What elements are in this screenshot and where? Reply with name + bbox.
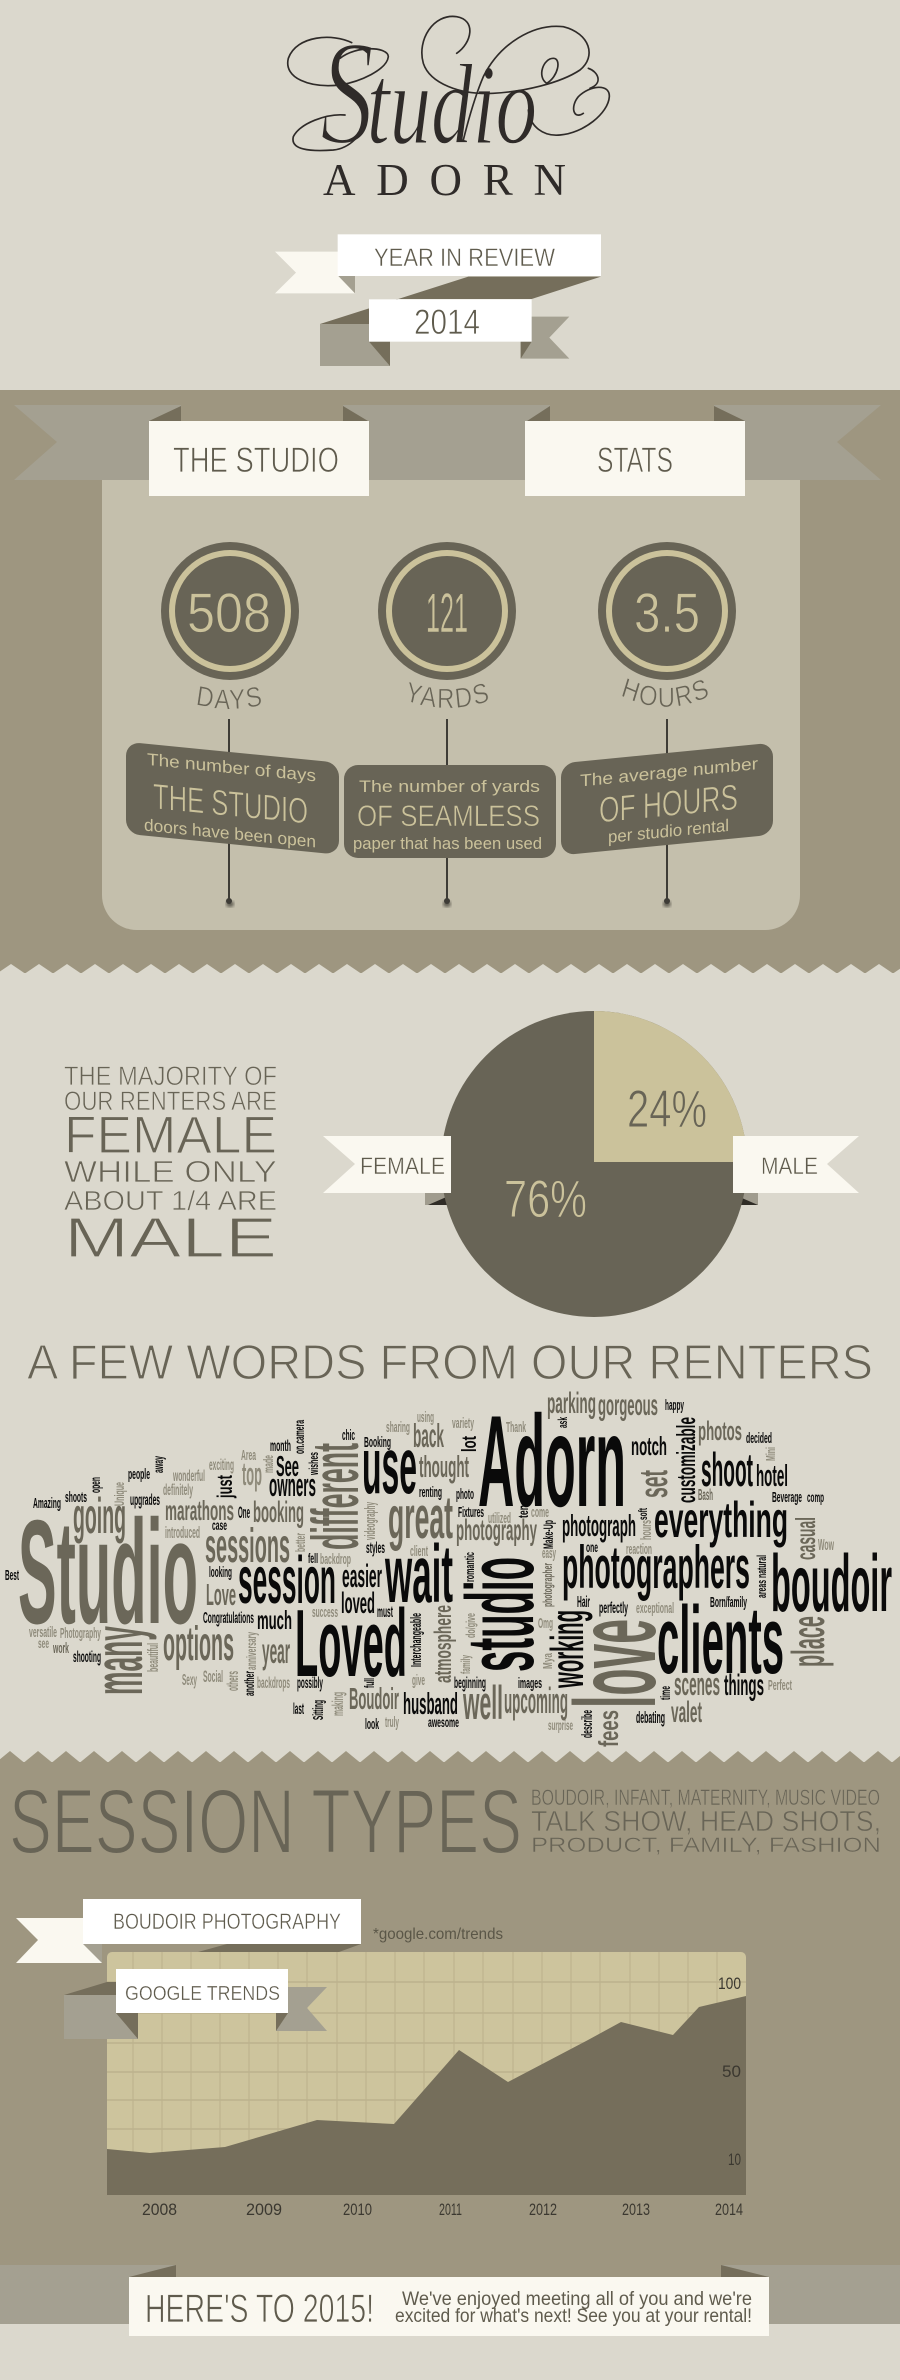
word cloud: Sitting bbox=[310, 1700, 327, 1720]
sign: of hours: per studio rental bbox=[608, 816, 729, 847]
word cloud: shooting bbox=[73, 1649, 101, 1666]
area chart: google trends: 2011 bbox=[439, 2200, 462, 2219]
word cloud: sessions bbox=[205, 1520, 290, 1573]
word cloud: Studio bbox=[18, 1490, 198, 1655]
word cloud: marathons bbox=[165, 1495, 234, 1526]
area chart: google trends: 50 bbox=[722, 2062, 741, 2081]
word cloud: hours bbox=[638, 1520, 655, 1540]
word cloud: utilized bbox=[488, 1510, 511, 1527]
panel: the studio stats band bbox=[0, 390, 900, 973]
word cloud: exceptional bbox=[636, 1600, 674, 1617]
word cloud: Mini bbox=[763, 1447, 778, 1461]
text block: majority of renters are female: MALE bbox=[64, 1206, 277, 1270]
sign: of seamless: The number of yards bbox=[359, 777, 540, 796]
word cloud: come bbox=[531, 1504, 549, 1521]
ribbon: year in review 2014: 2014 bbox=[414, 303, 480, 342]
word cloud: month bbox=[270, 1438, 291, 1455]
word cloud: wishes bbox=[306, 1452, 321, 1476]
stat: 3.5 hours bbox=[598, 542, 736, 707]
sign: of hours: OF HOURS bbox=[599, 776, 738, 831]
panel: session types band bbox=[0, 1751, 900, 2282]
word cloud: comp bbox=[807, 1489, 824, 1505]
word cloud: awesome bbox=[428, 1714, 459, 1730]
word cloud: client bbox=[410, 1543, 428, 1560]
word cloud: different bbox=[298, 1443, 372, 1550]
area chart: google trends: 2013 bbox=[622, 2200, 650, 2219]
text block: list of session types bbox=[531, 1785, 881, 1857]
word cloud: hotel bbox=[756, 1458, 788, 1493]
word cloud: photo bbox=[456, 1486, 474, 1503]
ribbon label: male: MALE bbox=[761, 1153, 818, 1180]
word cloud: upcoming bbox=[504, 1680, 568, 1721]
word cloud: atmosphere bbox=[430, 1605, 457, 1683]
heading: session types: SESSION TYPES bbox=[9, 1771, 522, 1873]
word cloud: options bbox=[163, 1618, 234, 1671]
area chart: google trends: 10 bbox=[728, 2150, 741, 2169]
hanging strings with pins bbox=[226, 719, 671, 907]
word cloud: much bbox=[257, 1605, 292, 1635]
word cloud: parking bbox=[547, 1387, 596, 1420]
stat: 3.5 hours: 3.5 bbox=[634, 581, 700, 644]
word cloud: decided bbox=[746, 1430, 772, 1447]
word cloud: soft bbox=[636, 1508, 650, 1520]
word cloud: Omg bbox=[538, 1615, 553, 1632]
word cloud: must bbox=[377, 1604, 393, 1621]
sign: the studio bbox=[126, 742, 339, 855]
word cloud: session bbox=[238, 1543, 336, 1618]
word cloud: Mya bbox=[540, 1653, 555, 1669]
sign: the studio: The number of days bbox=[147, 750, 316, 785]
text block: majority of renters are female: ABOUT 1/4 ARE bbox=[64, 1185, 277, 1216]
word cloud: making bbox=[330, 1692, 347, 1716]
word cloud: Make-Up bbox=[540, 1520, 556, 1549]
sign: of seamless bbox=[344, 765, 556, 858]
logo: Studio Adorn bbox=[288, 11, 609, 205]
text block: majority of renters are female: FEMALE bbox=[64, 1106, 277, 1165]
word cloud: areas natural bbox=[754, 1555, 769, 1598]
word cloud: just bbox=[214, 1475, 237, 1499]
ribbon: google trends bbox=[64, 1969, 327, 2039]
logo: Studio Adorn: Studio bbox=[320, 11, 537, 176]
heading: a few words from our renters: A FEW WORDS FROM OUR RENTERS bbox=[27, 1336, 873, 1390]
word cloud: Loved bbox=[295, 1590, 407, 1697]
word cloud: Wow bbox=[818, 1537, 834, 1554]
word cloud: exciting bbox=[209, 1457, 234, 1474]
word cloud: happy bbox=[665, 1397, 684, 1414]
word cloud: shoots bbox=[65, 1489, 87, 1506]
word cloud: wonderful bbox=[173, 1468, 205, 1485]
word cloud: see bbox=[38, 1635, 49, 1651]
word cloud: using bbox=[417, 1409, 434, 1426]
word cloud: case bbox=[212, 1517, 227, 1533]
stat: 508 days bbox=[161, 542, 299, 709]
word cloud: working bbox=[541, 1610, 593, 1688]
word cloud: possibly bbox=[297, 1675, 323, 1692]
ribbon: boudoir photography: BOUDOIR PHOTOGRAPHY bbox=[113, 1909, 341, 1934]
word cloud: beautiful bbox=[145, 1643, 162, 1672]
closing headline: HERE'S TO 2015! bbox=[145, 2287, 374, 2331]
area chart: google trends: 2012 bbox=[529, 2200, 557, 2219]
word cloud: lot bbox=[459, 1436, 481, 1452]
word cloud: give bbox=[412, 1672, 425, 1689]
word cloud: Beverage bbox=[772, 1489, 802, 1506]
word cloud: scenes bbox=[674, 1666, 720, 1702]
word cloud: Amazing bbox=[33, 1495, 61, 1512]
word cloud: One bbox=[238, 1503, 250, 1522]
word cloud: Photography bbox=[60, 1625, 101, 1642]
word cloud: versatile bbox=[29, 1624, 57, 1641]
word cloud: renting bbox=[419, 1484, 442, 1501]
stats card panel bbox=[102, 480, 800, 930]
word cloud: photograph bbox=[562, 1508, 636, 1543]
word cloud: perfectly bbox=[599, 1600, 628, 1617]
studio stats ribbon bbox=[14, 404, 881, 480]
word cloud: on.camera bbox=[291, 1420, 307, 1454]
word cloud: set bbox=[632, 1470, 676, 1498]
word cloud: ten bbox=[515, 1505, 531, 1518]
word cloud: Fixtures bbox=[458, 1504, 484, 1521]
word cloud: studio bbox=[447, 1557, 554, 1672]
sign: of hours: The average number bbox=[580, 754, 758, 791]
word cloud: well bbox=[463, 1676, 503, 1729]
word cloud: family bbox=[458, 1655, 473, 1674]
sign: the studio: THE STUDIO bbox=[153, 776, 308, 832]
word cloud: Sexy bbox=[182, 1672, 197, 1689]
stat: 508 days: 508 bbox=[187, 581, 271, 644]
word cloud: sharing bbox=[386, 1419, 410, 1436]
footer ribbon bbox=[0, 2264, 900, 2336]
logo: Studio Adorn: ADORN bbox=[323, 155, 566, 205]
stat: 121 yards: 121 bbox=[426, 581, 468, 644]
word cloud: love bbox=[552, 1619, 680, 1708]
word cloud: booking bbox=[253, 1496, 304, 1529]
word cloud: Booking bbox=[364, 1434, 391, 1451]
word cloud: year bbox=[262, 1632, 290, 1671]
word cloud: loved bbox=[341, 1587, 375, 1620]
word cloud: many bbox=[79, 1626, 157, 1695]
word cloud: Thank bbox=[506, 1419, 526, 1436]
word cloud: look bbox=[365, 1716, 379, 1733]
sign: of seamless: paper that has been used bbox=[353, 834, 542, 853]
closing message: excited for what's next! See you at your rental! bbox=[395, 2306, 752, 2327]
word cloud: others bbox=[225, 1671, 242, 1691]
word cloud: fees bbox=[593, 1710, 624, 1747]
word cloud: Bash bbox=[698, 1487, 713, 1504]
word cloud: Best bbox=[5, 1567, 19, 1584]
word cloud: valet bbox=[671, 1696, 702, 1729]
area chart: google trends: 100 bbox=[718, 1974, 741, 1993]
text block: list of session types: TALK SHOW, HEAD SHOTS, bbox=[531, 1806, 881, 1838]
pie chart: female 76% male 24% bbox=[441, 1011, 747, 1317]
text block: majority of renters are female: WHILE ONLY bbox=[64, 1154, 277, 1189]
stat: 3.5 hours: HOURS bbox=[622, 678, 708, 707]
word cloud: photos bbox=[698, 1416, 742, 1446]
sign: the studio: doors have been open bbox=[144, 816, 316, 851]
pie chart: female 76% male 24%: 76% bbox=[504, 1170, 587, 1229]
word cloud: Love bbox=[206, 1577, 236, 1612]
word cloud: Born/family bbox=[710, 1594, 747, 1611]
text block: majority of renters are female bbox=[64, 1061, 277, 1270]
word cloud: casual bbox=[790, 1517, 821, 1560]
sign: of seamless: OF SEAMLESS bbox=[357, 800, 540, 833]
word cloud: top bbox=[242, 1456, 262, 1492]
word cloud: husband bbox=[403, 1686, 458, 1721]
word cloud: time bbox=[657, 1686, 673, 1700]
word cloud: variety bbox=[452, 1415, 474, 1432]
word cloud: Boudoir bbox=[349, 1681, 399, 1716]
ribbon: year in review 2014: YEAR IN REVIEW bbox=[374, 244, 555, 272]
text block: majority of renters are female: THE MAJORITY OF bbox=[64, 1061, 277, 1091]
word cloud: away bbox=[150, 1456, 166, 1473]
word cloud: Hair bbox=[577, 1594, 590, 1611]
pie chart: female 76% male 24%: 24% bbox=[627, 1080, 707, 1139]
word cloud: gorgeous bbox=[598, 1389, 658, 1422]
sign: of hours bbox=[561, 743, 773, 855]
word cloud: fell bbox=[308, 1550, 318, 1566]
area chart: google trends: 2009 bbox=[246, 2200, 282, 2219]
area chart: google trends: 2008 bbox=[142, 2200, 177, 2219]
heading: stats: STATS bbox=[597, 441, 673, 480]
heading: stats bbox=[525, 421, 745, 496]
word cloud: beginning bbox=[454, 1675, 486, 1692]
word cloud: notch bbox=[631, 1431, 667, 1461]
text block: majority of renters are female: OUR RENTERS ARE bbox=[64, 1086, 277, 1116]
word cloud: chic bbox=[342, 1427, 355, 1444]
word cloud: great bbox=[388, 1484, 453, 1551]
word cloud: one bbox=[586, 1539, 598, 1555]
ribbon label: female: FEMALE bbox=[360, 1153, 445, 1180]
word cloud: reaction bbox=[626, 1541, 652, 1558]
word cloud: place bbox=[782, 1616, 834, 1667]
heading: the studio: THE STUDIO bbox=[173, 441, 339, 480]
closing message bbox=[395, 2289, 752, 2327]
word cloud: do/give bbox=[463, 1613, 478, 1638]
word cloud: easy bbox=[542, 1545, 556, 1562]
word cloud: owners bbox=[269, 1467, 316, 1503]
closing message: We've enjoyed meeting all of you and we're bbox=[402, 2289, 752, 2310]
word cloud: full bbox=[361, 1678, 377, 1688]
ribbon: year in review 2014 bbox=[275, 234, 601, 366]
word cloud: debating bbox=[636, 1708, 665, 1727]
area chart: google trends bbox=[107, 1952, 746, 2219]
stat: 508 days: DAYS bbox=[198, 686, 261, 709]
word cloud: going bbox=[73, 1488, 126, 1544]
word cloud: thought bbox=[419, 1449, 469, 1484]
stat: 121 yards bbox=[378, 542, 516, 708]
word cloud: upgrades bbox=[130, 1492, 160, 1509]
word cloud: better bbox=[292, 1533, 308, 1552]
word cloud: shoot bbox=[701, 1443, 753, 1496]
word cloud: styles bbox=[366, 1540, 385, 1557]
word cloud: everything bbox=[654, 1492, 788, 1548]
ribbon folds behind pie bbox=[425, 1193, 758, 1205]
area chart: google trends: 2010 bbox=[343, 2200, 372, 2219]
heading: the studio bbox=[149, 421, 369, 496]
word cloud: wait bbox=[385, 1529, 453, 1620]
word cloud: last bbox=[293, 1701, 304, 1718]
word cloud: Congratulations bbox=[203, 1610, 254, 1627]
word cloud: Perfect bbox=[768, 1677, 792, 1694]
word cloud: another bbox=[241, 1671, 257, 1696]
area chart: google trends: 2014 bbox=[715, 2200, 743, 2219]
word cloud: videography bbox=[362, 1502, 379, 1540]
word cloud: Area bbox=[241, 1447, 256, 1464]
word cloud: ask bbox=[555, 1417, 570, 1428]
word cloud: Interchangeable bbox=[408, 1613, 425, 1667]
word cloud: success bbox=[312, 1604, 338, 1621]
word cloud: things bbox=[724, 1669, 764, 1702]
word cloud: anniversary bbox=[243, 1632, 259, 1670]
word cloud: Unique bbox=[111, 1482, 127, 1506]
word cloud: Social bbox=[203, 1667, 223, 1686]
word cloud: people bbox=[128, 1466, 150, 1483]
ribbon: google trends: GOOGLE TRENDS bbox=[125, 1983, 280, 2005]
word cloud: surprise bbox=[548, 1717, 573, 1733]
ribbon label: female bbox=[323, 1136, 451, 1193]
word cloud: work bbox=[53, 1640, 69, 1657]
word cloud: romantic bbox=[462, 1552, 477, 1582]
word cloud: definitely bbox=[163, 1482, 193, 1499]
word cloud: backdrops bbox=[257, 1675, 290, 1692]
word cloud: photography bbox=[456, 1514, 537, 1547]
word cloud: made bbox=[260, 1455, 276, 1473]
word cloud: photographer bbox=[540, 1563, 555, 1607]
word cloud: truly bbox=[385, 1714, 399, 1731]
word cloud: customizable bbox=[671, 1417, 701, 1503]
ribbon label: male bbox=[733, 1136, 859, 1193]
word cloud: looking bbox=[209, 1564, 232, 1581]
word cloud: easier bbox=[342, 1558, 382, 1594]
word cloud bbox=[5, 1387, 892, 1747]
word cloud: images bbox=[518, 1675, 542, 1692]
word cloud: back bbox=[413, 1417, 444, 1454]
word cloud: open bbox=[87, 1477, 103, 1493]
word cloud: Adorn bbox=[478, 1388, 626, 1534]
word cloud: See bbox=[276, 1451, 299, 1483]
ribbon: boudoir photography bbox=[16, 1899, 361, 1963]
word cloud: use bbox=[362, 1421, 417, 1510]
word cloud: introduced bbox=[165, 1523, 200, 1542]
word cloud: backdrop bbox=[320, 1551, 351, 1568]
source note: *google.com/trends bbox=[373, 1926, 503, 1943]
word cloud: describe bbox=[579, 1710, 596, 1738]
stat: 121 yards: YARDS bbox=[409, 682, 488, 708]
text block: list of session types: PRODUCT, FAMILY, FASHION bbox=[531, 1834, 881, 1857]
